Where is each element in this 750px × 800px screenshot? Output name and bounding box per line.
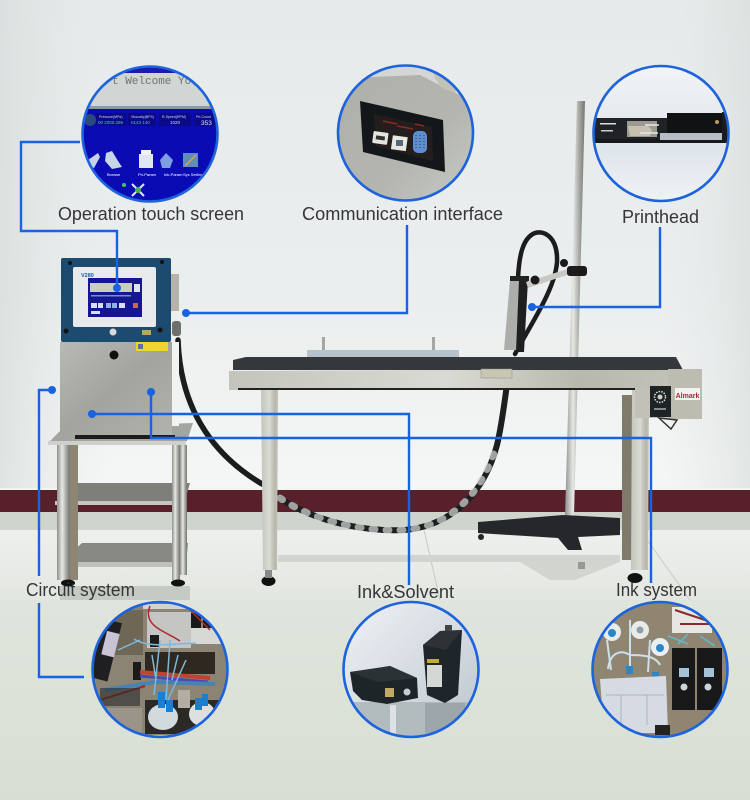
connector: circuit system (39, 386, 84, 677)
ink hose (172, 232, 557, 530)
circle: circuit system (88, 600, 235, 740)
circle: operation touch screen: Viscosity(BFS) (131, 115, 154, 119)
label: ink system: Ink system (616, 580, 697, 600)
circle: operation touch screen: Sys Setting (183, 172, 203, 177)
circle: operation touch screen: 1020 (170, 120, 181, 125)
inkjet printer stand (48, 423, 193, 586)
circle: operation touch screen: Browse (107, 172, 121, 177)
circle: printhead (592, 64, 732, 204)
label: operation touch screen: Operation touch screen (58, 204, 244, 224)
label: communication interface: Communication interface (302, 204, 503, 224)
circle: communication interface (336, 64, 476, 204)
conveyor pole and stand (478, 101, 620, 569)
Almark label: Almark (676, 393, 699, 400)
connector: ink and solvent (88, 410, 409, 585)
circle: operation touch screen: 00 2000.286 (98, 120, 124, 125)
connector: operation touch screen (21, 142, 121, 292)
circle: operation touch screen: 0143 140 (131, 120, 150, 125)
printhead on bracket (504, 259, 587, 352)
conveyor belt table (229, 337, 702, 586)
connector: communication interface (182, 225, 407, 317)
circle: ink system (590, 600, 732, 740)
circle: operation touch screen: Pri-Count (196, 115, 211, 119)
Almark label (675, 388, 700, 400)
inkjet printer touch panel: V280 (81, 273, 94, 279)
inkjet printer touch panel (61, 258, 179, 342)
callout lines (21, 142, 660, 677)
connector: printhead (528, 227, 660, 311)
connector: ink system (147, 388, 651, 583)
label: printhead: Printhead (622, 207, 699, 227)
circle: operation touch screen: R-Speed(RPM) (162, 115, 186, 119)
circle: operation touch screen: Pressure(MPa) (99, 115, 123, 119)
circle: ink and solvent (340, 600, 482, 742)
conveyor speed controller (650, 386, 671, 417)
inkjet printer cabinet (60, 342, 179, 439)
label: ink and solvent: Ink&Solvent (357, 582, 454, 602)
circle: operation touch screen: 353 (201, 120, 212, 127)
circle: operation touch screen (80, 64, 220, 204)
circle: operation touch screen: Ink-Param (164, 172, 183, 177)
label: circuit system: Circuit system (26, 580, 135, 600)
circle: operation touch screen: Pri-Param (138, 172, 157, 177)
circle: operation touch screen: t Welcome Yo (112, 76, 191, 88)
